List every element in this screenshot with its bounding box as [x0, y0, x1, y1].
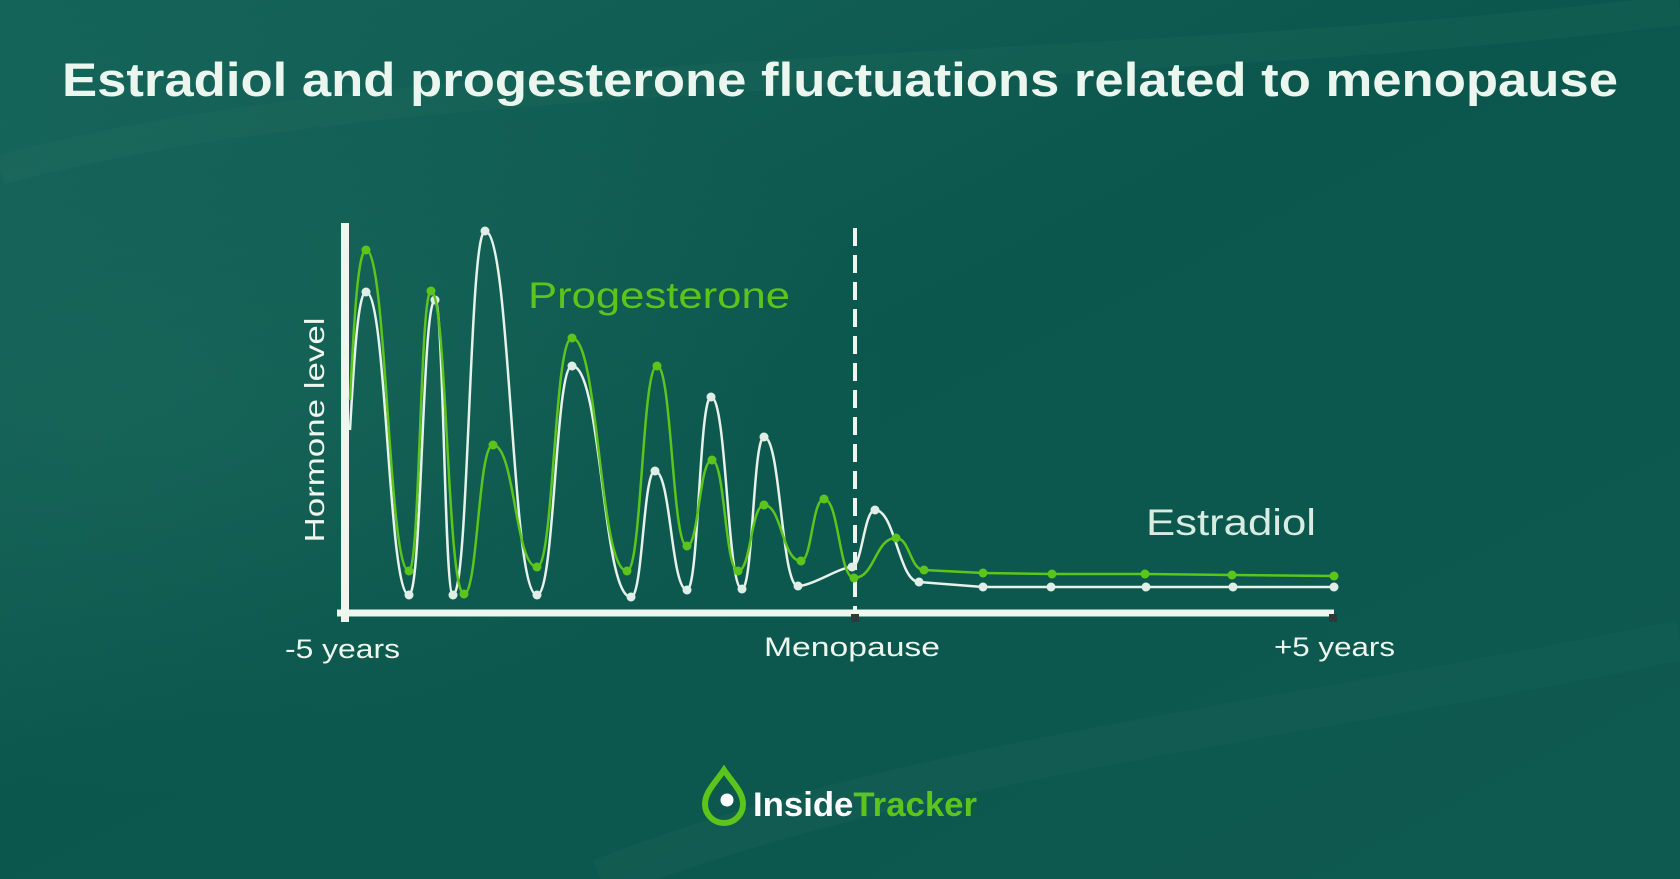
label: Progesterone: Progesterone: [528, 275, 790, 316]
x label: Menopause: Menopause: [764, 632, 940, 662]
x label: -5 years: -5 years: [285, 634, 400, 664]
icon: drop: [705, 770, 743, 823]
progesterone curve (green): [350, 246, 1338, 598]
label: Estradiol: Estradiol: [1146, 502, 1316, 543]
x label: +5 years: +5 years: [1274, 632, 1395, 662]
logo: [705, 770, 977, 824]
chart: [337, 223, 1338, 622]
x axis: [337, 610, 1334, 616]
y axis label: Hormone level: [299, 317, 330, 543]
estradiol curve (white): [350, 226, 1338, 602]
y axis: [341, 223, 349, 622]
menopause dashed line: [853, 228, 857, 610]
title: Estradiol and progesterone fluctuations related to menopause: [62, 53, 1618, 106]
logo text: InsideTracker: [753, 786, 977, 824]
